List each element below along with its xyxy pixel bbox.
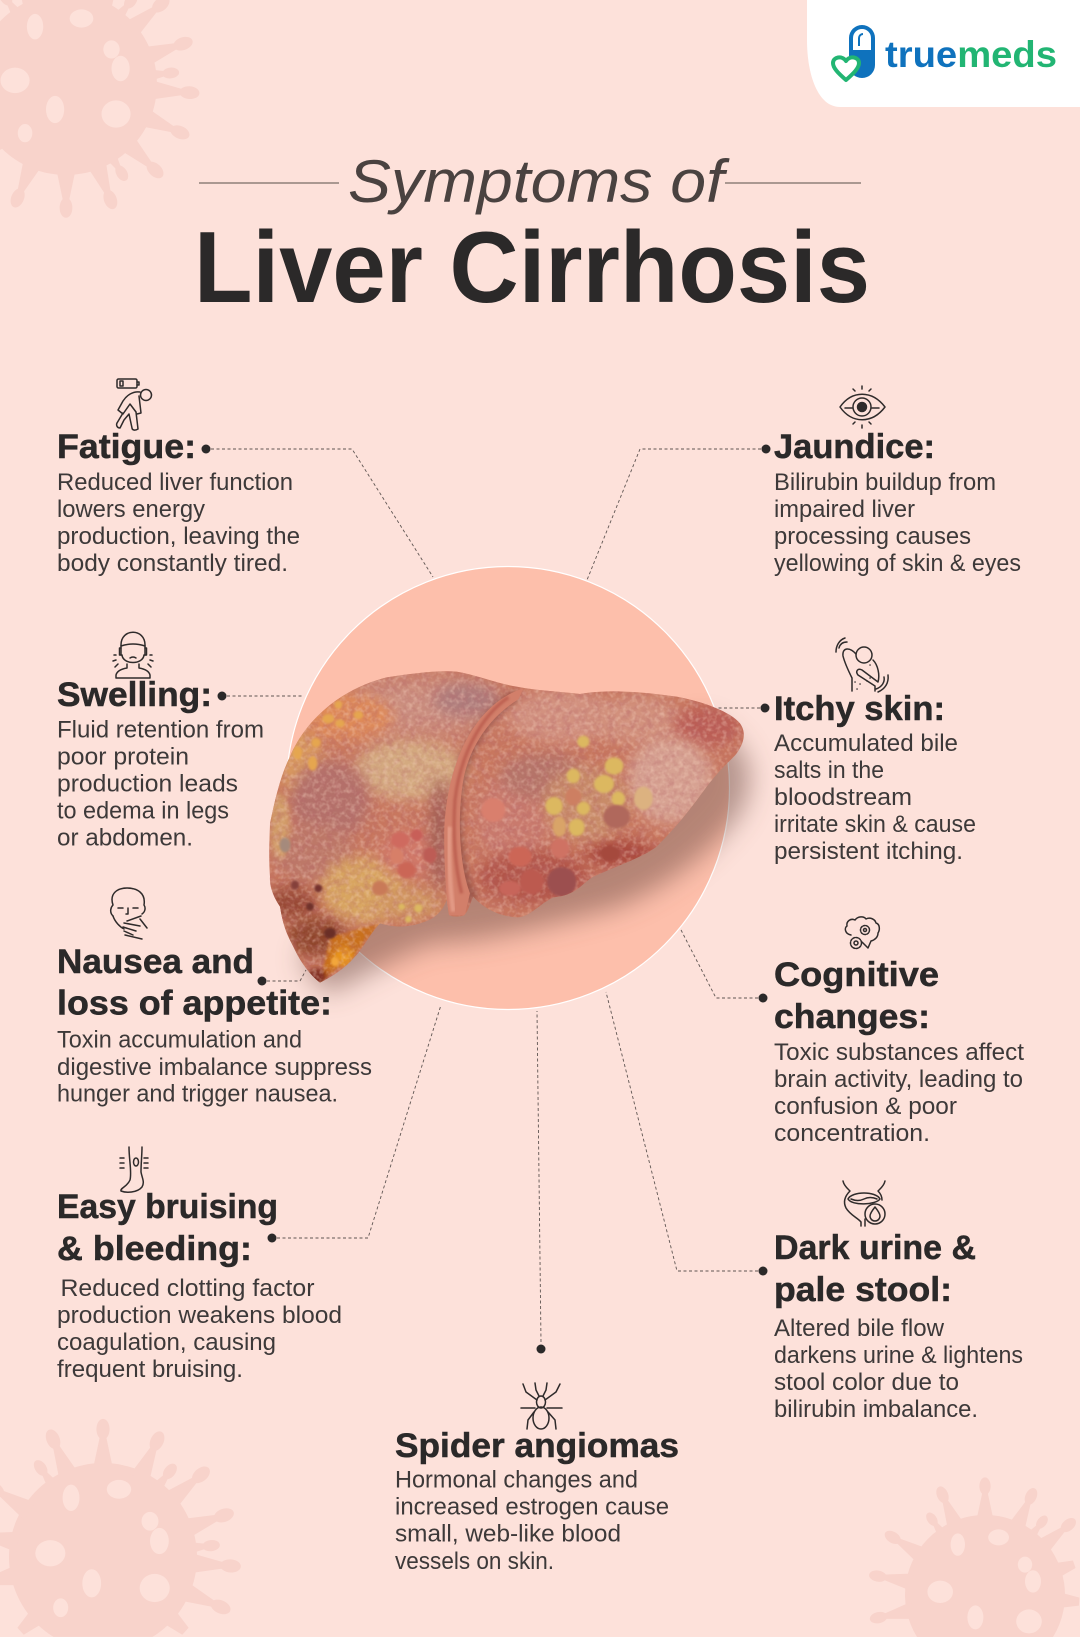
symptom: swelling	[57, 632, 264, 852]
heading: Dark urine &	[774, 1229, 976, 1267]
right lobe colour zones	[477, 690, 740, 903]
decorative virus: top left	[0, 0, 200, 218]
heading: Spider angiomas	[395, 1427, 679, 1465]
logo wordmark: truemeds	[885, 34, 1057, 75]
description: Toxin accumulation and	[57, 1027, 302, 1054]
yellow nodules	[293, 701, 653, 966]
icon: face with hand on mouth	[111, 888, 147, 939]
description: production weakens blood	[57, 1302, 342, 1329]
title line: Liver Cirrhosis: Liver Cirrhosis	[194, 212, 870, 324]
icon: brain with gears	[845, 917, 879, 948]
symptom: fatigue	[57, 379, 300, 577]
description: production leads	[57, 770, 238, 798]
symptom: nausea	[57, 888, 372, 1108]
description	[774, 730, 976, 865]
lobe fissure shadow	[456, 695, 517, 900]
symptom: itchy skin	[774, 638, 976, 865]
heading	[57, 943, 332, 1022]
description	[774, 469, 1021, 577]
description: frequent bruising.	[57, 1356, 243, 1383]
description: coagulation, causing	[57, 1329, 276, 1356]
description: Altered bile flow	[774, 1315, 945, 1342]
connector lines	[202, 444, 770, 1354]
description	[57, 1275, 342, 1383]
description	[57, 1027, 372, 1108]
central circle	[286, 566, 730, 1010]
description: salts in the	[774, 757, 884, 784]
description: yellowing of skin & eyes	[774, 550, 1021, 577]
description	[57, 716, 264, 852]
description: concentration.	[774, 1120, 930, 1147]
description: poor protein	[57, 744, 189, 770]
description: increased estrogen cause	[395, 1494, 669, 1521]
symptom: jaundice	[774, 386, 1021, 577]
description: Bilirubin buildup from	[774, 469, 996, 496]
description: irritate skin & cause	[774, 811, 976, 838]
description: small, web-like blood	[395, 1521, 621, 1548]
heading: Cognitive	[774, 956, 939, 994]
description: lowers energy	[57, 496, 205, 523]
mottled texture	[270, 675, 711, 981]
description: digestive imbalance suppress	[57, 1054, 372, 1081]
description	[774, 1315, 1023, 1423]
liver shadow	[300, 720, 750, 993]
description: Accumulated bile	[774, 730, 958, 757]
description: impaired liver	[774, 496, 915, 523]
description: Fluid retention from	[57, 716, 264, 744]
heading: Fatigue:	[57, 428, 196, 466]
heading: Swelling:	[57, 676, 212, 714]
liver illustration	[260, 660, 760, 993]
description: Hormonal changes and	[395, 1466, 638, 1494]
description: or abdomen.	[57, 824, 193, 852]
icon: bladder with drop	[843, 1181, 885, 1226]
icon: capsule	[849, 25, 875, 78]
description: bilirubin imbalance.	[774, 1396, 978, 1423]
description: body constantly tired.	[57, 550, 288, 577]
description: to edema in legs	[57, 798, 229, 824]
heading	[774, 1229, 976, 1309]
decorative virus: bottom left	[0, 1419, 242, 1637]
description	[774, 1039, 1024, 1147]
icon: spider	[521, 1383, 562, 1429]
heading: & bleeding:	[57, 1230, 252, 1268]
heading	[774, 956, 939, 1036]
icon: heart	[833, 57, 859, 80]
description: hunger and trigger nausea.	[57, 1080, 338, 1108]
description: bloodstream	[774, 784, 912, 811]
description: persistent itching.	[774, 838, 963, 865]
heading: Jaundice:	[774, 428, 935, 466]
heading: Easy bruising	[57, 1188, 278, 1226]
description	[57, 469, 300, 577]
description: Toxic substances affect	[774, 1039, 1024, 1066]
liver body	[269, 671, 744, 982]
symptom: easy bruising	[57, 1147, 342, 1383]
description: confusion & poor	[774, 1093, 957, 1120]
description: stool color due to	[774, 1369, 959, 1396]
description: darkens urine & lightens	[774, 1342, 1023, 1369]
icon: tired person with low battery	[117, 379, 152, 430]
icon: eye	[840, 386, 885, 428]
icon: swollen face	[113, 632, 153, 678]
heading	[57, 1188, 278, 1268]
description: Reduced clotting factor	[60, 1275, 314, 1302]
heading: Itchy skin:	[774, 690, 945, 728]
description: production, leaving the	[57, 523, 300, 550]
description	[395, 1466, 669, 1575]
falciform ligament	[444, 688, 523, 915]
symptom: dark urine and pale stool	[774, 1181, 1023, 1423]
logo panel	[807, 0, 1080, 107]
heading: loss of appetite:	[57, 984, 332, 1022]
description: processing causes	[774, 523, 971, 550]
description: Reduced liver function	[57, 469, 293, 496]
icon: person scratching	[836, 638, 888, 692]
heading: changes:	[774, 998, 930, 1036]
heading: Nausea and	[57, 943, 254, 981]
decorative virus: bottom right	[868, 1477, 1080, 1637]
icon: leg with bruise	[120, 1147, 148, 1192]
heading: pale stool:	[774, 1271, 952, 1309]
symptom: spider angiomas	[395, 1383, 679, 1575]
description: brain activity, leading to	[774, 1066, 1023, 1093]
left lobe colour zones	[263, 677, 500, 985]
title line: Symptoms of: Symptoms of	[348, 148, 730, 215]
red nodules	[280, 788, 630, 939]
description: vessels on skin.	[395, 1548, 554, 1575]
title	[194, 148, 870, 324]
symptom: cognitive changes	[774, 917, 1024, 1147]
